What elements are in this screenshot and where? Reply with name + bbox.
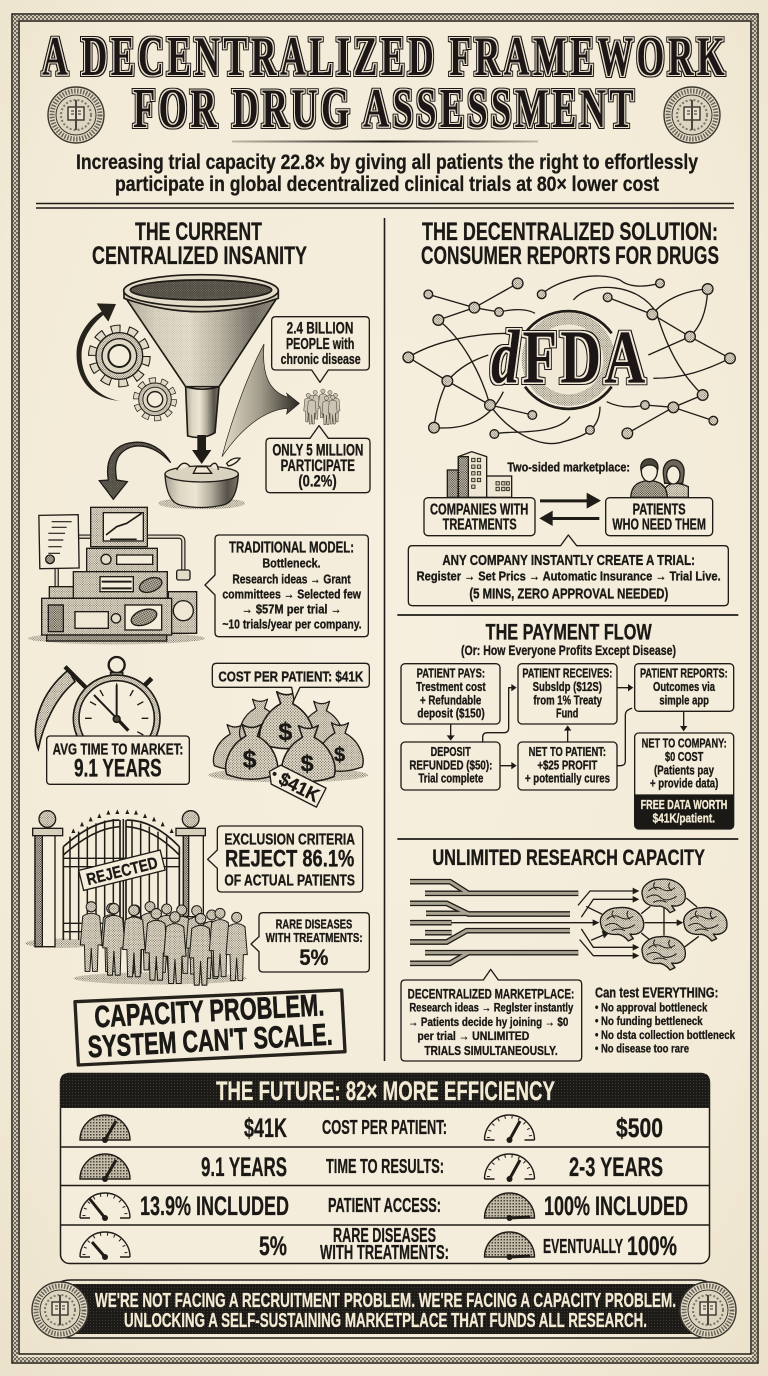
callout: traditional model: Bottleneck. xyxy=(262,556,321,571)
callout: decentralized marketplace xyxy=(401,969,582,1061)
box: patient receives: from 1% Treaty xyxy=(533,693,602,707)
callout: exclusion criteria: OF ACTUAL PATIENTS xyxy=(224,873,355,890)
callout: traditional model: TRADITIONAL MODEL: xyxy=(229,540,354,557)
research pipelines xyxy=(410,882,578,963)
icon: funnel xyxy=(124,275,278,437)
marketplace label: Two-sided marketplace: xyxy=(507,461,630,475)
panel: payment flow xyxy=(397,615,738,839)
panel: time, cost, gate xyxy=(25,657,369,1065)
box: deposit refunded: Trial complete xyxy=(418,772,483,786)
box: net to company xyxy=(635,733,734,829)
callout: rare diseases: WITH TREATMENTS: xyxy=(266,930,363,945)
box: deposit refunded xyxy=(401,742,500,790)
table header xyxy=(60,1073,710,1108)
icon: money bags: $ xyxy=(334,745,345,767)
box: patient reports: Outcomes via xyxy=(653,680,716,694)
callout: cost per patient: COST PER PATIENT: $41K xyxy=(218,670,364,686)
box: net to patient: +$25 PROFIT xyxy=(537,758,598,772)
row: patient access: 100% INCLUDED xyxy=(544,1191,688,1221)
icon: price tag: $41K xyxy=(276,768,324,806)
stamp: capacity problem: SYSTEM CAN'T SCALE. xyxy=(87,1018,333,1064)
heading: the current centralized insanity xyxy=(92,218,307,270)
callout: traditional model: committees → Selected few xyxy=(222,586,361,601)
callout: any company: Register → Set Prics → Automatic Insurance → Trial Live. xyxy=(417,570,721,584)
row: time to results: 2-3 YEARS xyxy=(569,1152,663,1182)
row: rare diseases: 100% xyxy=(627,1231,677,1261)
callout: decentralized marketplace: DECENTRALIZED MARKETPLACE: xyxy=(408,985,574,1001)
row: rare diseases: RARE DISEASES xyxy=(333,1225,436,1247)
callout: 2.4 billion: PEOPLE with xyxy=(286,336,354,353)
icon: money bags: $ xyxy=(243,745,257,773)
callout: any company xyxy=(408,535,728,606)
callout: only 5 million: PARTICIPATE xyxy=(281,456,355,475)
row: rare diseases: 5% xyxy=(259,1231,287,1261)
box: patient pays: PATIENT PAYS: xyxy=(417,667,485,681)
icon: stopwatch with scythe xyxy=(35,657,160,762)
logo: dFDA: dFDA xyxy=(491,315,648,400)
box: patient pays: deposit ($150) xyxy=(417,707,485,721)
callout: avg time to market: AVG TIME TO MARKET: xyxy=(53,742,183,759)
row: rare diseases: EVENTUALLY xyxy=(543,1236,623,1258)
box: patient pays: Trestment cost xyxy=(416,680,486,694)
row: cost per patient: COST PER PATIENT: xyxy=(322,1117,447,1139)
box: patient pays: + Refundable xyxy=(420,693,481,707)
box: net to patient: NET TO PATIENT: xyxy=(529,745,606,759)
callout: only 5 million: ONLY 5 MILLION xyxy=(272,441,363,460)
flow arrows to brains xyxy=(452,888,698,959)
box: patient pays xyxy=(401,664,500,724)
row: time to results: 9.1 YEARS xyxy=(201,1152,287,1182)
box: deposit refunded: DEPOSIT xyxy=(431,745,471,759)
icon: left seal xyxy=(48,87,104,143)
callout: exclusion criteria: EXCLUSION CRITERIA xyxy=(224,831,355,848)
icon: gate xyxy=(25,809,205,948)
panel: dFDA network and marketplace xyxy=(403,276,735,606)
list: can test everything: • No disease too rare xyxy=(595,1042,689,1056)
subtitle xyxy=(76,151,698,196)
callout: rare diseases xyxy=(251,913,369,972)
table header: THE FUTURE: 82× MORE EFFICIENCY xyxy=(216,1076,555,1106)
heading: the current centralized insanity: CENTRALIZED INSANITY xyxy=(92,242,307,270)
panel: funnel illustration xyxy=(28,275,370,644)
row: patient access: PATIENT ACCESS: xyxy=(328,1195,441,1217)
icon: rejected crowd xyxy=(73,902,247,985)
list: can test everything: • No funding bettleneck xyxy=(595,1014,703,1028)
box: net to company: NET TO COMPANY: xyxy=(642,736,727,750)
icon: patients xyxy=(631,459,688,497)
box: net to patient xyxy=(518,742,617,790)
icon: right seal xyxy=(664,87,720,143)
callout: any company: (5 MINS, ZERO APPROVAL NEEDED) xyxy=(469,586,668,602)
arrow: swoosh to crowd xyxy=(222,344,299,457)
arrow: companies to patients xyxy=(540,493,601,509)
list: can test everything: Can test EVERYTHING: xyxy=(595,986,718,1002)
callout: exclusion criteria: REJECT 86.1% xyxy=(225,846,354,873)
box: deposit refunded: REFUNDED ($50): xyxy=(409,758,492,772)
list: can test everything xyxy=(595,986,735,1056)
stamp: capacity problem xyxy=(75,988,345,1065)
box: net to company: + provide data) xyxy=(650,777,718,791)
network diagram xyxy=(403,276,735,444)
box: patients xyxy=(606,498,713,536)
stamp: capacity problem: CAPACITY PROBLEM. xyxy=(94,988,325,1034)
box: companies xyxy=(424,498,535,536)
callout: traditional model: ~10 trials/year per company. xyxy=(222,616,362,631)
list: can test everything: • No dsta collection bottleneck xyxy=(595,1028,735,1042)
box: patient reports xyxy=(635,664,734,711)
flow arrows xyxy=(447,684,687,769)
row: rare diseases xyxy=(80,1225,677,1264)
icon: large gear xyxy=(93,329,146,383)
row: patient access xyxy=(80,1191,688,1221)
subtitle: participate in global decentralized clinical trials at 80× lower cost xyxy=(115,173,659,196)
box: patient receives: Subsldp ($12S) xyxy=(533,680,602,694)
arrow: funnel to bowl xyxy=(192,435,211,464)
icon: money bags xyxy=(208,692,368,782)
box: patient receives xyxy=(518,664,617,724)
box: companies: TREATMENTS xyxy=(443,516,517,533)
icon: small gear xyxy=(136,381,174,418)
box: patient reports: simple app xyxy=(659,693,709,707)
box: patient receives: PATIENT RECEIVES: xyxy=(522,667,612,681)
subheading: (Or: How Everyone Profits Except Disease) xyxy=(461,642,676,658)
heading: the payment flow: THE PAYMENT FLOW xyxy=(486,619,652,644)
panel: unlimited research capacity xyxy=(401,845,735,1061)
icon: money bags: $ xyxy=(301,751,314,777)
callout: rare diseases: 5% xyxy=(299,945,328,970)
callout: 2.4 billion xyxy=(272,317,369,382)
banner message xyxy=(95,1290,676,1332)
callout: any company: ANY COMPANY INSTANTLY CREATE A TRIAL: xyxy=(442,553,695,569)
callout: avg time to market xyxy=(47,736,189,784)
arrow: patients to companies xyxy=(539,511,599,526)
heading: the decentralized solution xyxy=(421,218,719,270)
icon: money bags: $ xyxy=(278,718,292,746)
callout: 2.4 billion: chronic disease xyxy=(281,352,361,368)
row: cost per patient xyxy=(80,1113,663,1143)
box: patients: PATIENTS xyxy=(633,501,686,518)
icon: bowl xyxy=(158,458,245,509)
callout: rare diseases: RARE DISEASES xyxy=(276,916,352,931)
box: net to company: $0 COST xyxy=(665,750,704,764)
box: patients: WHO NEED THEM xyxy=(612,516,706,533)
box: patient receives: Fund xyxy=(556,707,578,721)
callout: traditional model: Research ideas → Grant xyxy=(232,571,351,586)
icon: right banner seal xyxy=(680,1282,736,1338)
callout: traditional model: → $57M per trial → xyxy=(242,601,342,616)
callout: traditional model xyxy=(205,535,368,637)
box: net to company: (Patients pay xyxy=(654,763,714,777)
row: rare diseases: WITH TREATMENTS: xyxy=(320,1242,449,1264)
callout: only 5 million: (0.2%) xyxy=(298,472,337,491)
callout: decentralized marketplace: → Patients decide hy joining → $0 xyxy=(408,1015,569,1029)
icon: rejected sign: REJECTED xyxy=(85,853,160,889)
callout: only 5 million xyxy=(266,426,370,493)
heading: the current centralized insanity: THE CURRENT xyxy=(135,218,262,246)
panel: the future comparison table xyxy=(60,1073,710,1264)
box: companies: COMPANIES WITH xyxy=(430,501,528,518)
row: cost per patient: $500 xyxy=(616,1113,663,1143)
callout: avg time to market: 9.1 YEARS xyxy=(74,756,162,783)
row: patient access: 13.9% INCLUDED xyxy=(140,1191,289,1221)
icon: price tag xyxy=(265,762,326,807)
callout: exclusion criteria xyxy=(208,826,363,892)
icon: trial machine xyxy=(28,507,205,644)
icon: company buildings xyxy=(447,452,512,497)
callout: decentralized marketplace: Research ideas → Reglster instantly xyxy=(409,1001,574,1015)
arrow: curved to machine xyxy=(99,442,171,499)
callout: decentralized marketplace: TRIALS SIMULTANEOUSLY. xyxy=(424,1044,558,1058)
row: time to results: TIME TO RESULTS: xyxy=(326,1156,444,1178)
box: net to company: FREE DATA WORTH xyxy=(641,798,727,812)
icon: brains xyxy=(600,879,727,970)
title xyxy=(42,26,728,140)
row: cost per patient: $41K xyxy=(244,1113,287,1143)
bottom banner xyxy=(32,1280,736,1338)
icon: crowd xyxy=(304,389,340,425)
box: patient reports: PATIENT REPORTS: xyxy=(640,667,728,681)
box: net to patient: + potentially cures xyxy=(525,772,610,786)
list: can test everything: • No approval bottleneck xyxy=(595,1001,708,1015)
icon: left banner seal xyxy=(32,1282,88,1338)
icon: circular arrow xyxy=(77,303,120,401)
row: time to results xyxy=(80,1152,663,1182)
box: net to company: $41K/patient. xyxy=(653,812,715,826)
callout: decentralized marketplace: per trial → UNLIMITED xyxy=(417,1029,530,1043)
callout: 2.4 billion: 2.4 BILLION xyxy=(287,318,353,337)
callout: cost per patient xyxy=(212,663,369,700)
